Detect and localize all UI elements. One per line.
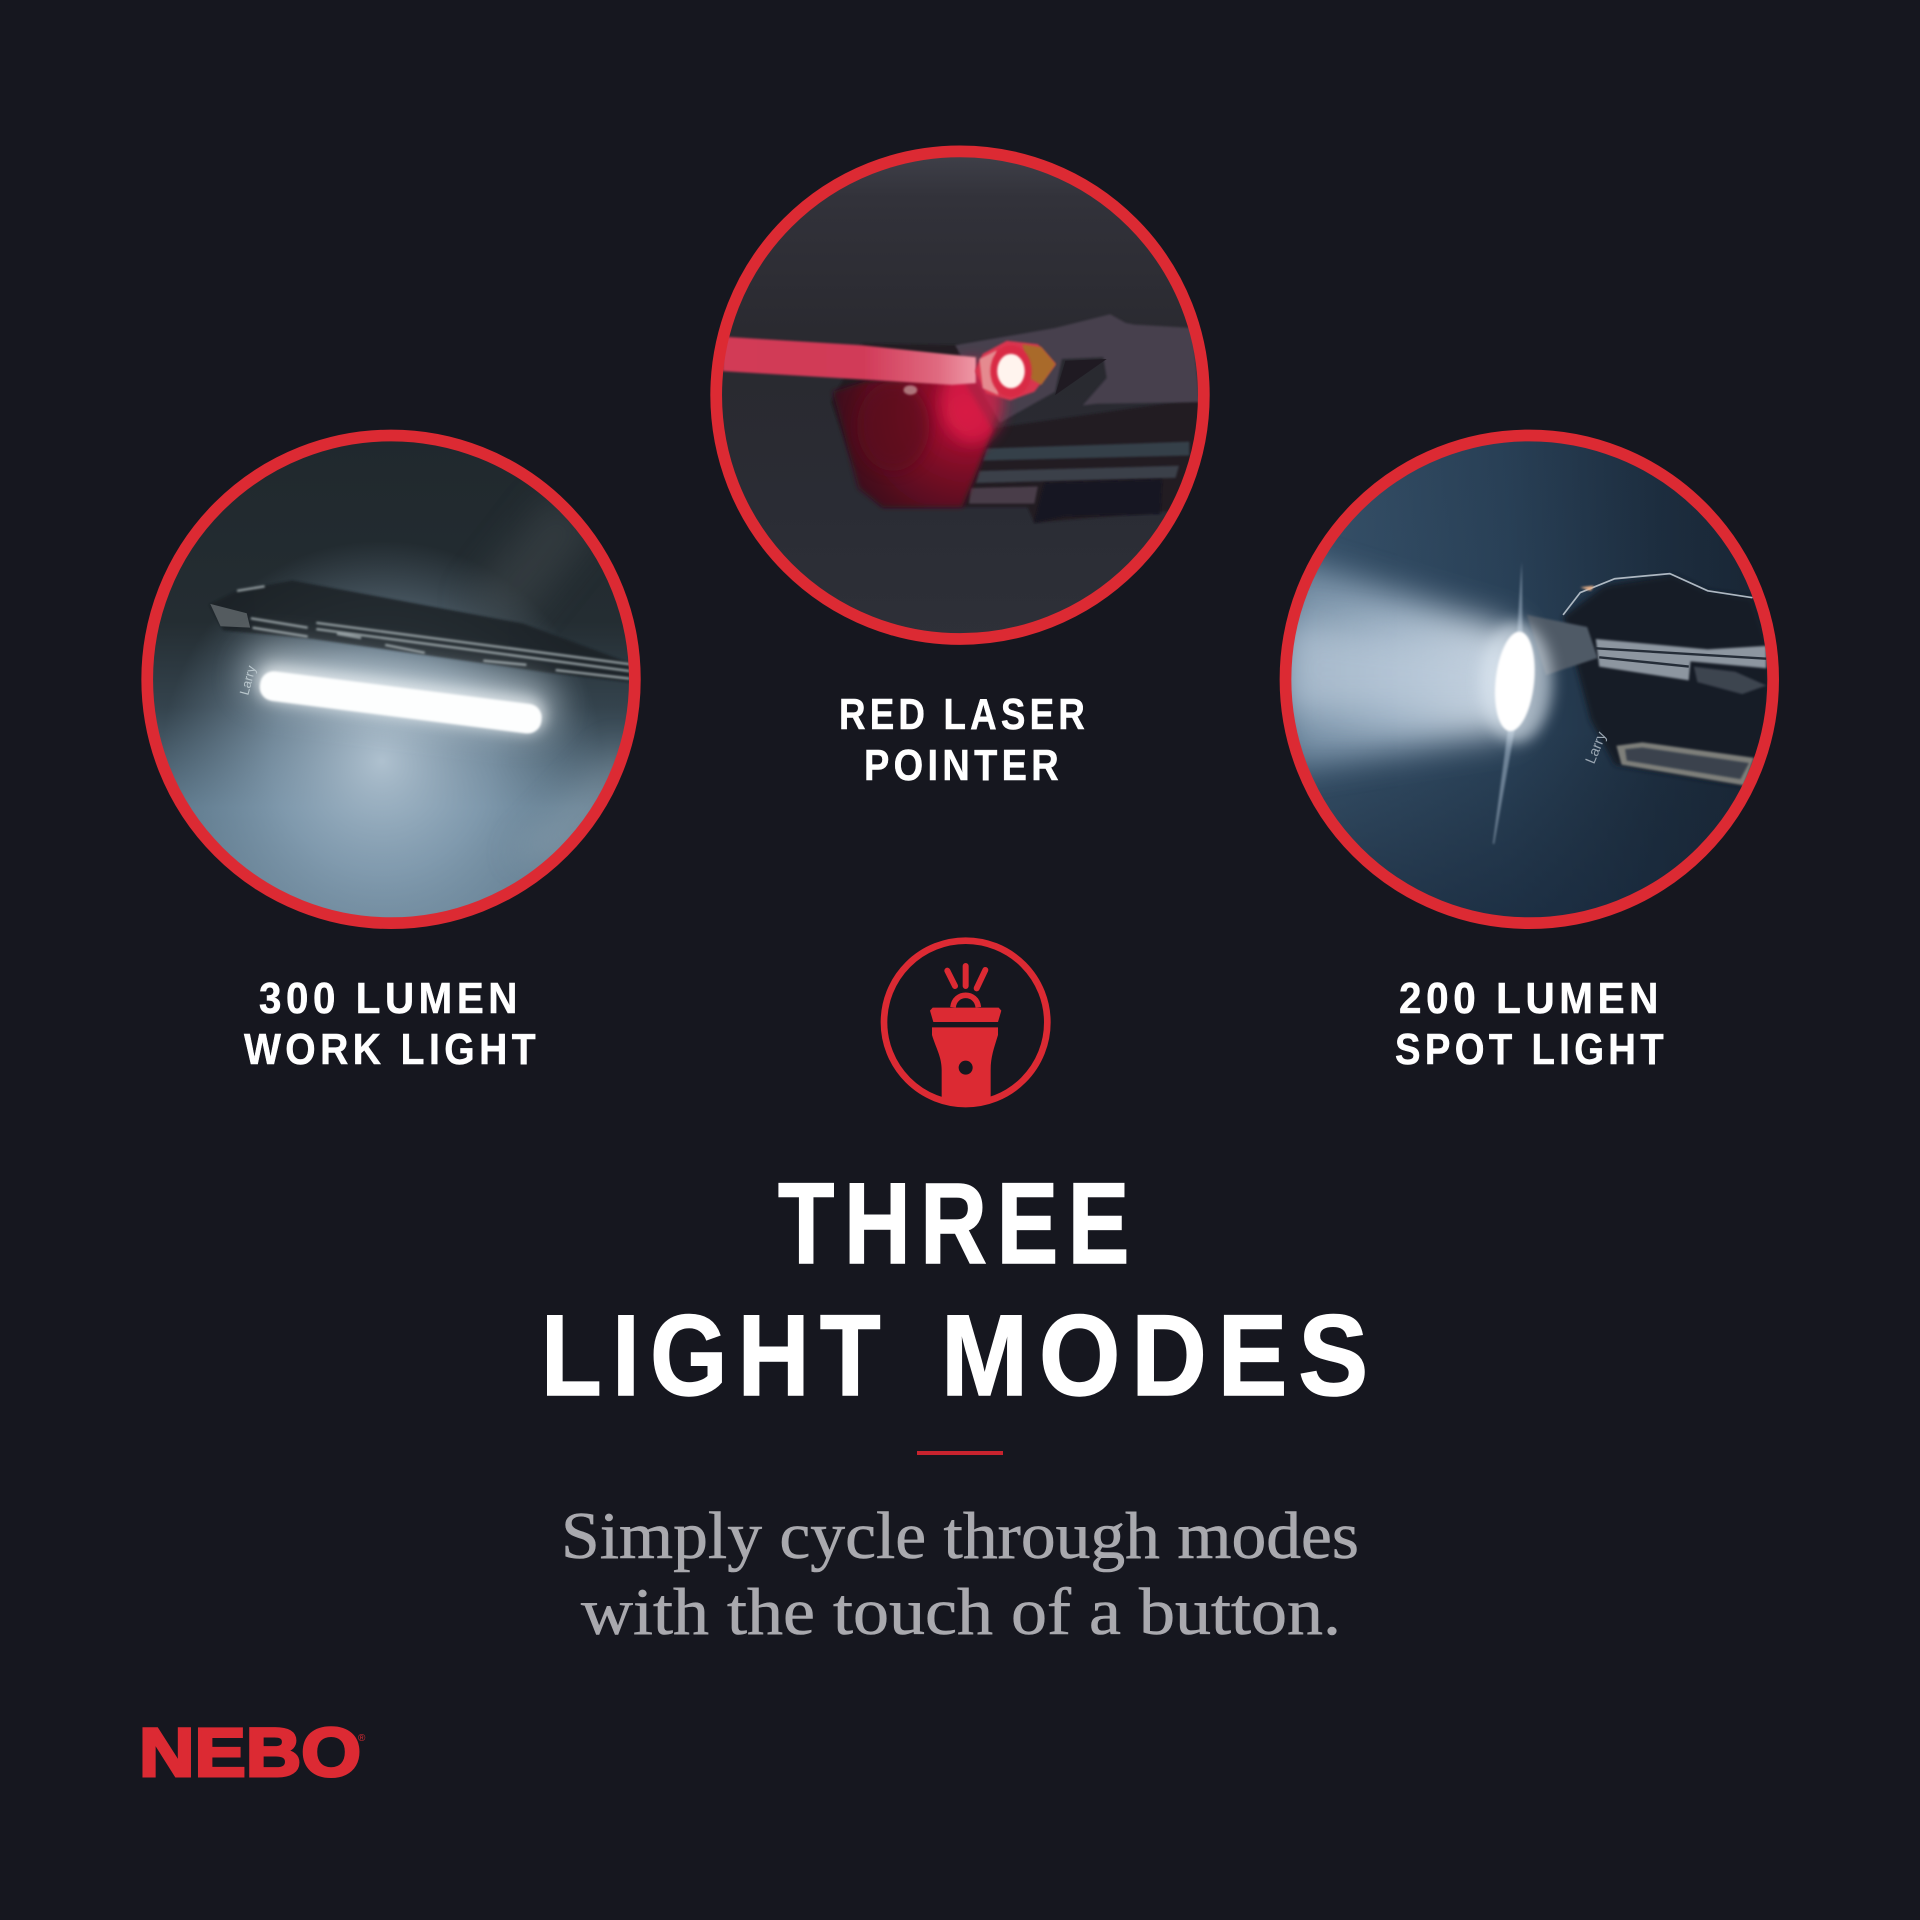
laser lens <box>975 341 1056 400</box>
panel: work light photo <box>141 431 643 933</box>
title: LIGHT <box>541 1292 891 1420</box>
title <box>541 1160 1379 1420</box>
subtitle text: with the touch of a button. <box>581 1575 1341 1649</box>
subtitle text: Simply cycle through modes <box>561 1499 1359 1573</box>
ring: spot light <box>1285 435 1773 923</box>
label: 300 lumen work light: 300 LUMEN <box>259 974 522 1023</box>
flashlight body <box>831 314 1200 523</box>
panel: red laser photo <box>711 147 1213 650</box>
red glow on head <box>833 378 993 507</box>
divider line <box>917 1451 1003 1455</box>
logo: NEBO: NEBO <box>139 1714 361 1791</box>
label: 200 lumen spot light: 200 LUMEN <box>1399 974 1663 1023</box>
label: 300 lumen work light <box>244 974 540 1074</box>
label: red laser pointer: POINTER <box>864 741 1063 790</box>
lens flare <box>1493 562 1523 844</box>
flashlight body <box>1527 574 1770 785</box>
ring: red laser <box>716 151 1204 639</box>
label: 200 lumen spot light: SPOT LIGHT <box>1395 1025 1668 1074</box>
logo: NEBO: ® <box>358 1733 366 1744</box>
laser beam <box>723 337 976 385</box>
label: 200 lumen spot light <box>1395 974 1668 1074</box>
panel: spot light photo <box>1281 431 1783 933</box>
ring: work light <box>147 435 635 923</box>
beam <box>1281 558 1515 768</box>
icon: flashlight in circle <box>884 941 1047 1110</box>
label: red laser pointer: RED LASER <box>839 690 1089 739</box>
light bar <box>258 670 543 735</box>
marking: product name: Larry <box>1583 729 1610 766</box>
flashlight body <box>210 580 630 682</box>
lens <box>1494 630 1536 732</box>
marking: product name: Larry <box>237 664 259 697</box>
label: 300 lumen work light: WORK LIGHT <box>244 1025 540 1074</box>
subtitle text <box>561 1499 1359 1649</box>
label: red laser pointer <box>839 690 1089 790</box>
light bar glow <box>244 647 557 734</box>
title: MODES <box>941 1292 1379 1420</box>
title: THREE <box>778 1160 1139 1288</box>
